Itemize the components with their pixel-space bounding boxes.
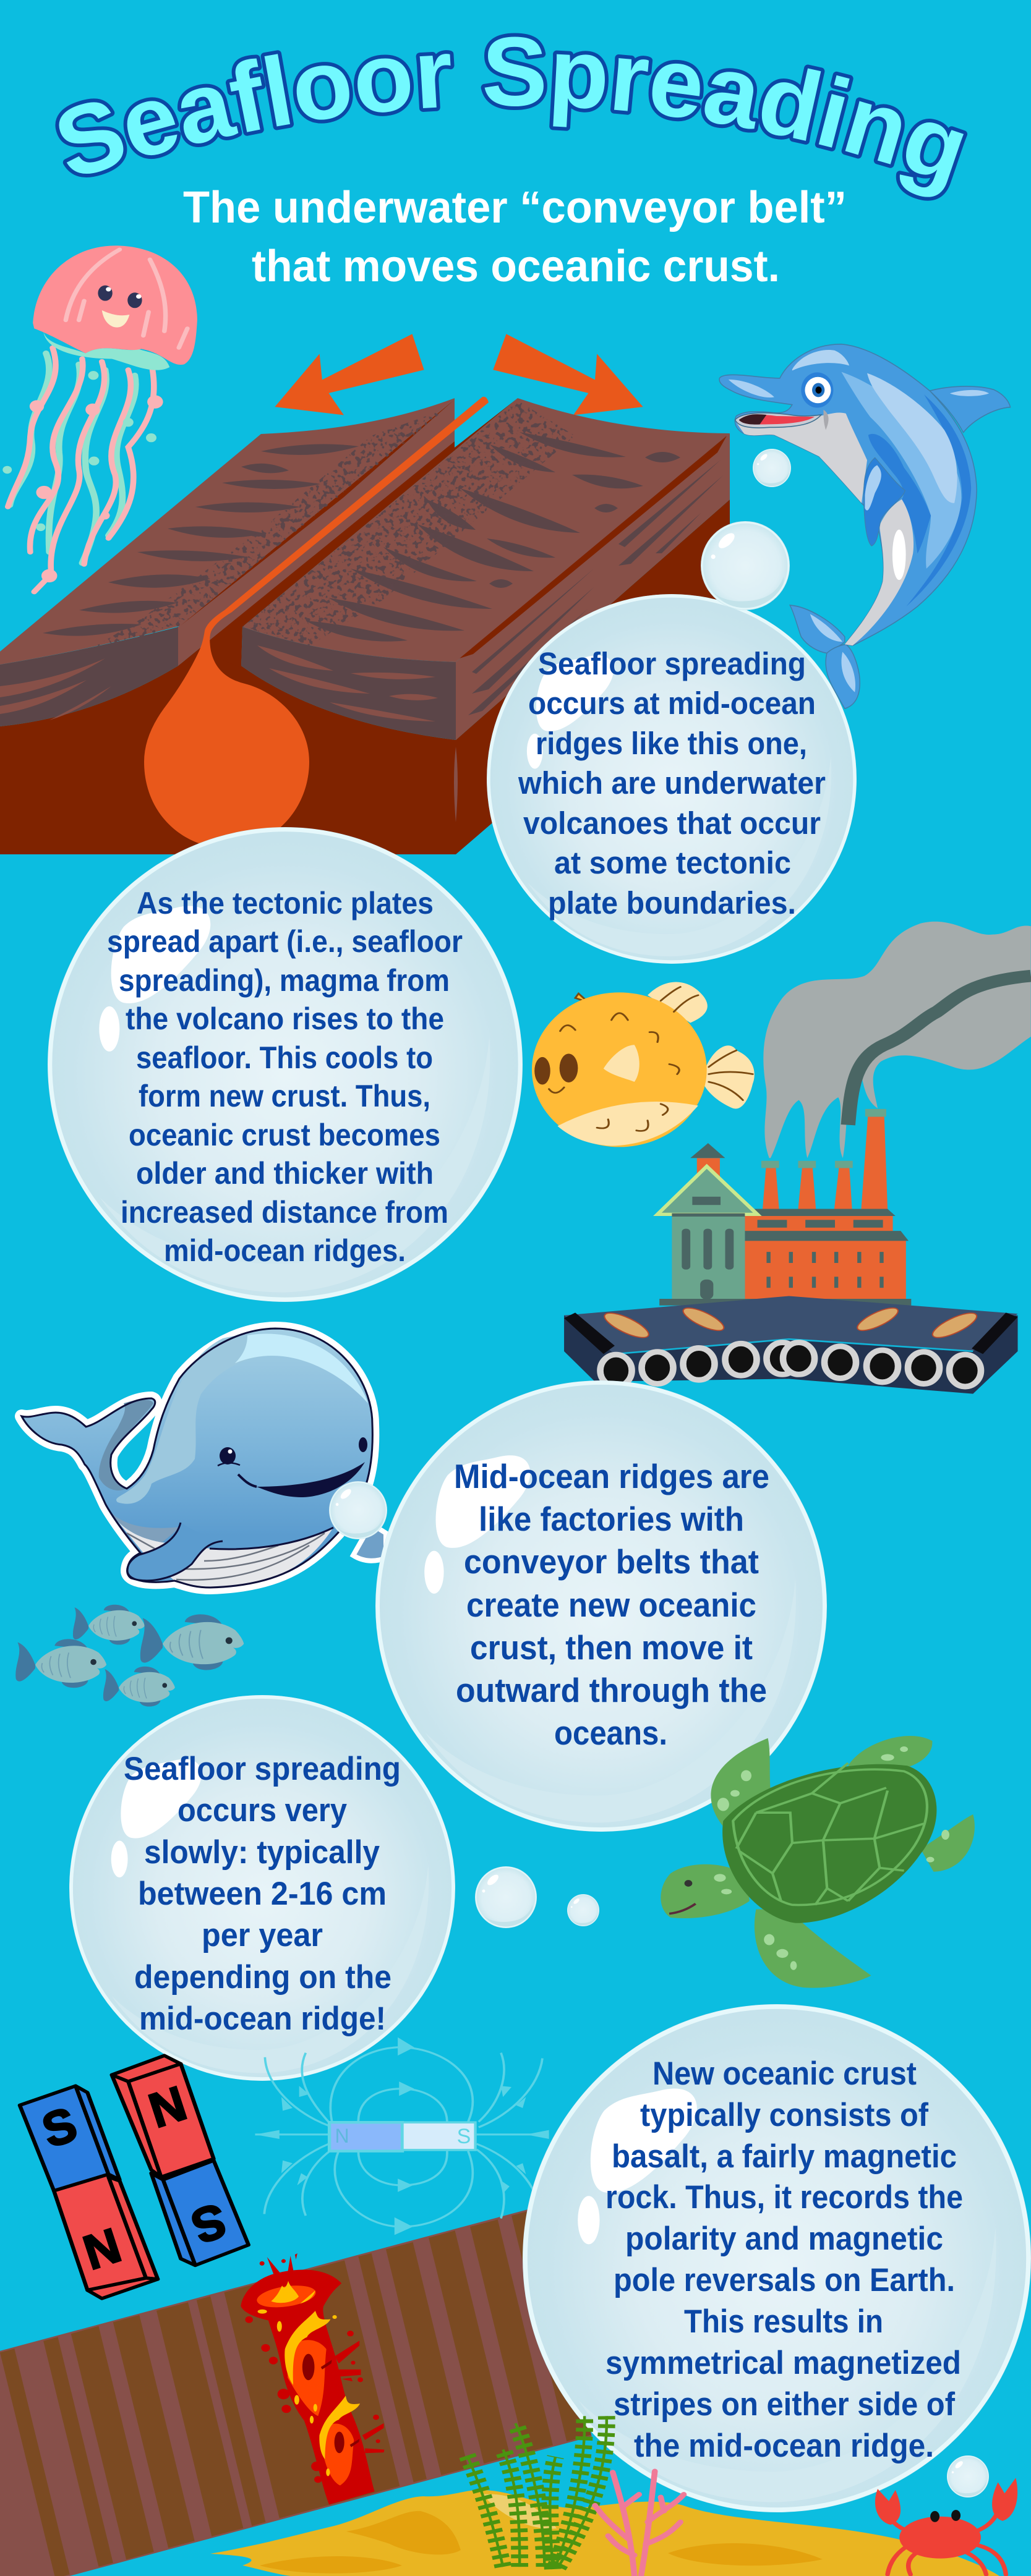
icon: whale [22,1328,386,1588]
text: magnetic stripes: symmetrical magnetized [605,2345,961,2381]
text: magma rises: the volcano rises to the [126,1001,444,1036]
text: factory analogy: conveyor belts that [464,1542,759,1581]
bubble: beside dolphin large [701,521,790,610]
text: magma rises: mid-ocean ridges. [164,1233,406,1268]
text: magma rises: increased distance from [121,1195,448,1230]
text: spreading rate: Seafloor spreading [124,1751,401,1787]
subtitle [183,183,847,291]
text: factory analogy: create new oceanic [466,1586,756,1624]
icon: bar magnet field lines [255,2038,549,2235]
magnet: left: S [36,2096,83,2158]
magnet: left [20,2086,158,2298]
text: factory analogy: like factories with [479,1500,744,1538]
bubble: above crab [947,2455,989,2497]
icon: pufferfish [532,982,755,1147]
text: mid-ocean ridges: which are underwater [518,765,826,801]
text: factory analogy [454,1457,769,1752]
panel: bubble 5 [523,2004,1031,2512]
text: magma rises: As the tectonic plates [137,886,434,920]
text: mid-ocean ridges: ridges like this one, [536,726,807,761]
icon: school of fish [15,1605,244,1707]
text: magma rises: seafloor. This cools to [136,1040,433,1075]
text: mid-ocean ridges [518,646,826,920]
text: factory analogy: oceans. [554,1714,667,1752]
text: spreading rate: mid-ocean ridge! [139,2000,386,2037]
panel: bubble 2 [48,827,523,1302]
bubble: beside whale [329,1481,387,1539]
panel: bubble 4 [69,1695,455,2081]
icon: seaweed [467,2416,607,2569]
text: magma rises: older and thicker with [136,1156,434,1191]
panel: bubble 3 [375,1380,827,1832]
icon: bar magnet field lines: S [457,2125,471,2148]
bubble: middle small [567,1894,599,1926]
icon: dolphin [719,344,1011,708]
icon: sea turtle [661,1736,975,1988]
sandy seafloor [210,2490,999,2576]
text: magnetic stripes: This results in [684,2303,883,2340]
text: magnetic stripes [605,2055,963,2464]
text: magnetic stripes: the mid-ocean ridge. [634,2428,934,2464]
text: magnetic stripes: rock. Thus, it records the [605,2179,963,2216]
text: magnetic stripes: stripes on either side of [614,2386,955,2423]
magnetized crust band [0,2204,592,2576]
smoke plumes [763,922,1031,1158]
text: magma rises: oceanic crust becomes [129,1118,440,1152]
magnet: right: S [186,2193,233,2255]
arrow: left plate motion [275,334,424,415]
dark smoke stream [848,976,1031,1125]
text: magnetic stripes: New oceanic crust [652,2055,917,2092]
text: factory analogy: Mid-ocean ridges are [454,1457,769,1495]
text: spreading rate: per year [202,1917,323,1953]
bubble: beside dolphin small [753,449,791,487]
text: factory analogy: outward through the [456,1671,767,1709]
panel: bubble 1 [487,594,857,964]
magnet: right: N [143,2075,192,2138]
text: spreading rate: depending on the [134,1959,391,1996]
text: magma rises: form new crust. Thus, [139,1079,430,1113]
text: magma rises [107,886,463,1268]
text: mid-ocean ridges: Seafloor spreading [538,646,806,681]
mid-ocean ridge block diagram [0,397,730,854]
text: spreading rate [124,1751,401,2037]
text: factory analogy: crust, then move it [470,1628,753,1667]
magnet: left: N [77,2217,127,2281]
text: mid-ocean ridges: plate boundaries. [548,885,796,920]
icon: factory on conveyor belt [564,922,1031,1394]
text: magma rises: spread apart (i.e., seafloor [107,924,463,959]
text: mid-ocean ridges: occurs at mid-ocean [528,686,816,721]
text: mid-ocean ridges: volcanoes that occur [523,806,821,841]
text: spreading rate: slowly: typically [144,1834,380,1871]
text: magnetic stripes: pole reversals on Earth. [614,2262,955,2298]
text: magnetic stripes: basalt, a fairly magnetic [612,2138,957,2175]
bubble: middle large [475,1866,537,1928]
subtitle: The underwater “conveyor belt” [183,183,847,232]
icon: bar magnet field lines: N [335,2125,349,2147]
text: spreading rate: occurs very [178,1792,347,1829]
text: magma rises: spreading), magma from [119,963,450,998]
text: magnetic stripes: typically consists of [640,2097,928,2133]
icon: jellyfish [2,245,197,592]
icon: crab [875,2478,1017,2575]
text: mid-ocean ridges: at some tectonic [554,845,791,880]
icon: coral [595,2472,684,2576]
conveyor belt [564,1316,1018,1394]
title: Seafloor Spreading [55,33,967,201]
arrow: right plate motion [493,334,643,415]
icon: erupting lava [241,2253,384,2504]
icon: magnet pair [20,2055,249,2298]
text: magnetic stripes: polarity and magnetic [625,2221,943,2257]
subtitle: that moves oceanic crust. [252,242,780,291]
text: spreading rate: between 2-16 cm [138,1876,387,1912]
magnet: right [112,2055,249,2265]
